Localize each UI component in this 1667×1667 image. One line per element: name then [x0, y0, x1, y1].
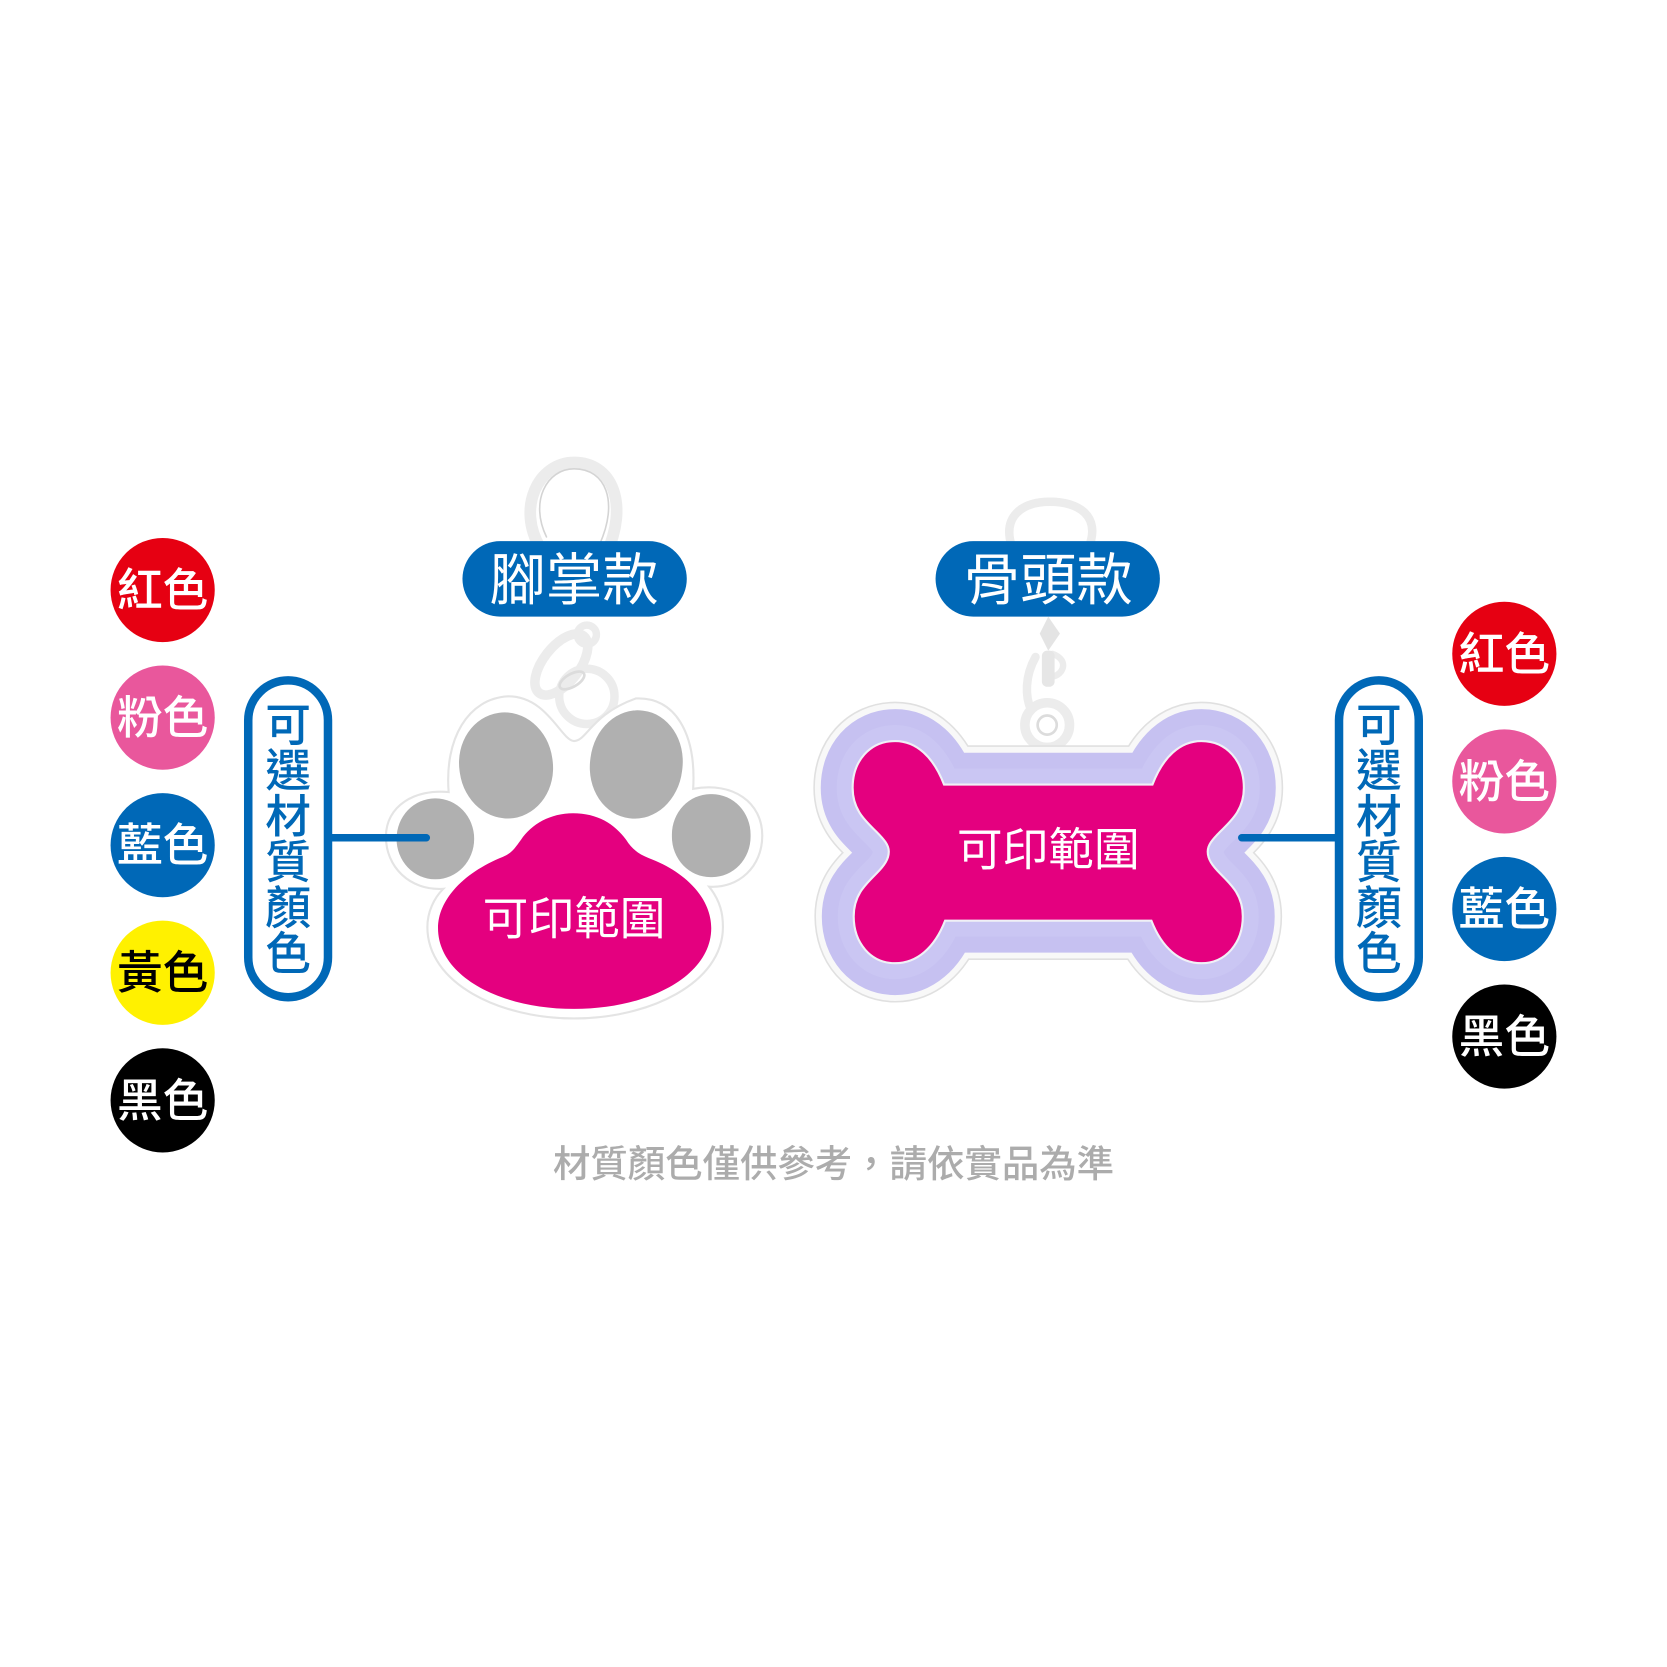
paw printable text: 可印範圍 [483, 893, 666, 944]
paw toes [397, 705, 751, 879]
bone printable text: 可印範圍 [957, 824, 1140, 875]
label: right selectable material colours: 色 [1356, 929, 1402, 980]
label: right selectable material colours: 質 [1356, 837, 1402, 888]
colour chip: red [1452, 602, 1556, 706]
colour chip: blue: 藍色 [1459, 884, 1550, 935]
paw printable pad [438, 813, 711, 1009]
label: right selectable material colours: 材 [1356, 791, 1402, 842]
paw tag [386, 696, 762, 1018]
bone heading [936, 541, 1160, 617]
paw silhouette [386, 696, 762, 1018]
footnote: 材質顏色僅供參考，請依實品為準 [553, 1143, 1114, 1185]
colour chip: blue [111, 793, 215, 897]
colour chip: pink [1452, 729, 1556, 834]
label: right selectable material colours: 顏 [1356, 883, 1402, 934]
colour chip: yellow [111, 921, 215, 1025]
label: left selectable material colours: 色 [265, 929, 311, 980]
label: left selectable material colours: 顏 [265, 883, 311, 934]
colour chip: pink: 粉色 [117, 693, 208, 744]
bone inner clear layer [853, 741, 1244, 963]
colour chip: black [1452, 984, 1556, 1089]
colour chip: red: 紅色 [117, 565, 208, 616]
colour chip: black: 黑色 [1459, 1012, 1550, 1063]
colour chip: black [111, 1048, 215, 1152]
paw heading [462, 541, 687, 617]
bone printable area [853, 741, 1244, 963]
label: left selectable material colours: 可 [265, 700, 311, 751]
right connector line [1242, 834, 1336, 841]
colour chip: pink: 粉色 [1459, 756, 1550, 807]
colour chip: blue [1452, 857, 1556, 961]
colour chip: blue: 藍色 [117, 820, 208, 871]
bone lavender material band [853, 741, 1244, 963]
label: left selectable material colours: 材 [265, 791, 311, 842]
bone heading: 骨頭款 [964, 549, 1133, 612]
label: right selectable material colours: 可 [1356, 700, 1402, 751]
colour chip: pink [111, 666, 215, 770]
paw heading: 腳掌款 [490, 549, 659, 612]
panel: right colour options [1452, 602, 1556, 1089]
bone clear outer edge [853, 741, 1244, 963]
colour chip: red [111, 538, 215, 642]
colour chip: red: 紅色 [1459, 629, 1550, 680]
bone clasp and rings [1009, 502, 1092, 747]
bone tag [853, 741, 1244, 963]
label: right selectable material colours [1339, 680, 1419, 997]
colour chip: black: 黑色 [117, 1075, 208, 1126]
paw clasp and rings [525, 462, 617, 724]
colour chip: yellow: 黃色 [117, 948, 208, 999]
label: left selectable material colours: 質 [265, 837, 311, 888]
label: left selectable material colours [248, 680, 328, 997]
panel: left colour options [111, 538, 215, 1152]
label: right selectable material colours: 選 [1356, 746, 1402, 797]
label: left selectable material colours: 選 [265, 746, 311, 797]
left connector line [332, 834, 426, 841]
bone lighter band highlight [853, 741, 1244, 963]
